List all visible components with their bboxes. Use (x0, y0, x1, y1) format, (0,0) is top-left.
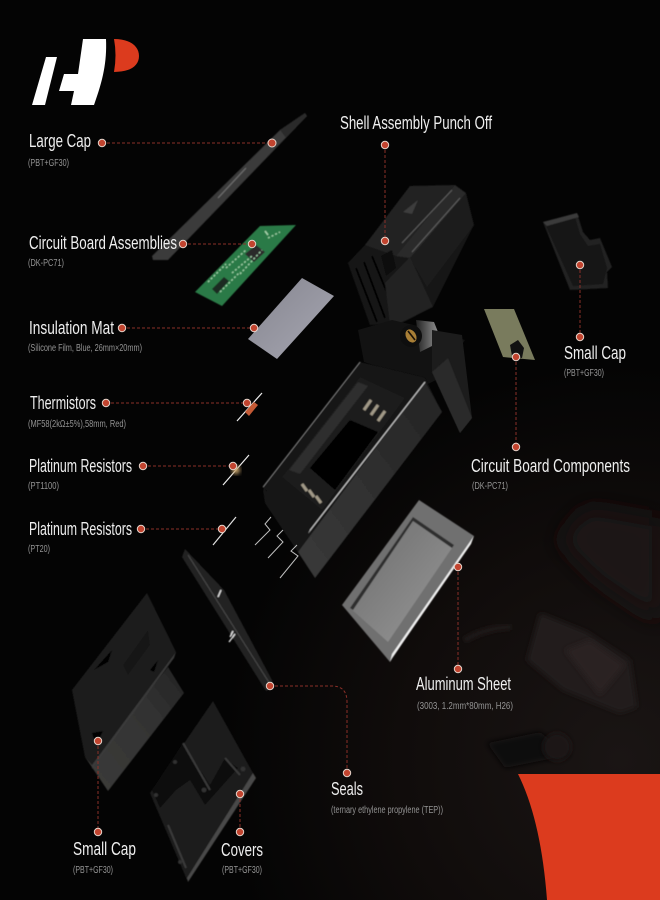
callout: Large Cap: Large Cap (29, 131, 91, 151)
callout: Thermistors (28, 393, 251, 430)
part: connector socket (358, 320, 472, 433)
red corner panel (518, 774, 660, 900)
callout: Small Cap lower: (PBT+GF30) (73, 865, 113, 876)
callout: Circuit Board Assemblies (28, 233, 256, 269)
callout: Circuit Board Assemblies: Circuit Board Assemblies (29, 233, 177, 253)
callout: Thermistors: Thermistors (30, 393, 96, 413)
part: circuit board (195, 225, 296, 306)
part: large cap strip (152, 113, 307, 260)
callout: Covers (221, 790, 263, 876)
callout: Insulation Mat: Insulation Mat (29, 318, 114, 338)
callout: Aluminum Sheet: (3003, 1.2mm*80mm, H26) (417, 701, 513, 712)
part: right small cap (543, 213, 612, 290)
part: box terminal pins (255, 517, 298, 578)
logo (32, 39, 139, 105)
callout: Aluminum Sheet (416, 563, 513, 712)
callout: Small Cap lower (73, 737, 136, 876)
part: seal (182, 549, 274, 691)
part: insulation mat (248, 278, 334, 359)
part: PT1100 platinum resistor (223, 455, 249, 485)
callout: Thermistors: (MF58(2kΩ±5%),58mm, Red) (28, 419, 126, 430)
callout: Circuit Board Components (471, 353, 630, 492)
callout: Small Cap lower: Small Cap (73, 839, 136, 859)
part: sensor box body (263, 358, 472, 578)
callout: Circuit Board Assemblies: (DK-PC71) (28, 258, 64, 269)
callout: Circuit Board Components: (DK-PC71) (472, 481, 508, 492)
callout: Platinum Resistors PT1100: Platinum Resistors (29, 456, 132, 476)
part: aluminum sheet (342, 500, 474, 662)
callout: Platinum Resistors PT20 (28, 519, 226, 555)
callout: Large Cap (28, 131, 276, 169)
callout: Platinum Resistors PT20: (PT20) (28, 544, 50, 555)
callout: Aluminum Sheet: Aluminum Sheet (416, 674, 511, 694)
callout: Large Cap: (PBT+GF30) (28, 158, 69, 169)
callout: Small Cap right: (PBT+GF30) (564, 368, 604, 379)
part: large lower cap (72, 593, 184, 791)
callout: Platinum Resistors PT1100 (28, 456, 237, 492)
callout: Small Cap right (564, 261, 626, 379)
callout: Seals: Seals (331, 779, 363, 799)
part: thermistor (237, 393, 262, 421)
part: PT20 platinum resistor (213, 517, 236, 545)
callout: Insulation Mat (28, 318, 258, 354)
part: lower cover (150, 701, 256, 882)
callout: Shell Assembly Punch Off (340, 113, 493, 245)
callout: Shell Assembly Punch Off: Shell Assembly Punch Off (340, 113, 493, 133)
callout: Small Cap right: Small Cap (564, 343, 626, 363)
callout: Platinum Resistors PT20: Platinum Resistors (29, 519, 132, 539)
callout: Covers: (PBT+GF30) (222, 865, 262, 876)
callout: Platinum Resistors PT1100: (PT1100) (28, 481, 59, 492)
callout: Seals: (ternary ethylene propylene (TEP)) (331, 805, 443, 816)
part: board component with thermal pad (484, 309, 535, 360)
part: shell assembly upper housing (348, 185, 474, 325)
callout: Covers: Covers (221, 840, 263, 860)
callout: Insulation Mat: (Silicone Film, Blue, 26mm×20mm) (28, 343, 142, 354)
callout: Seals (266, 682, 443, 816)
